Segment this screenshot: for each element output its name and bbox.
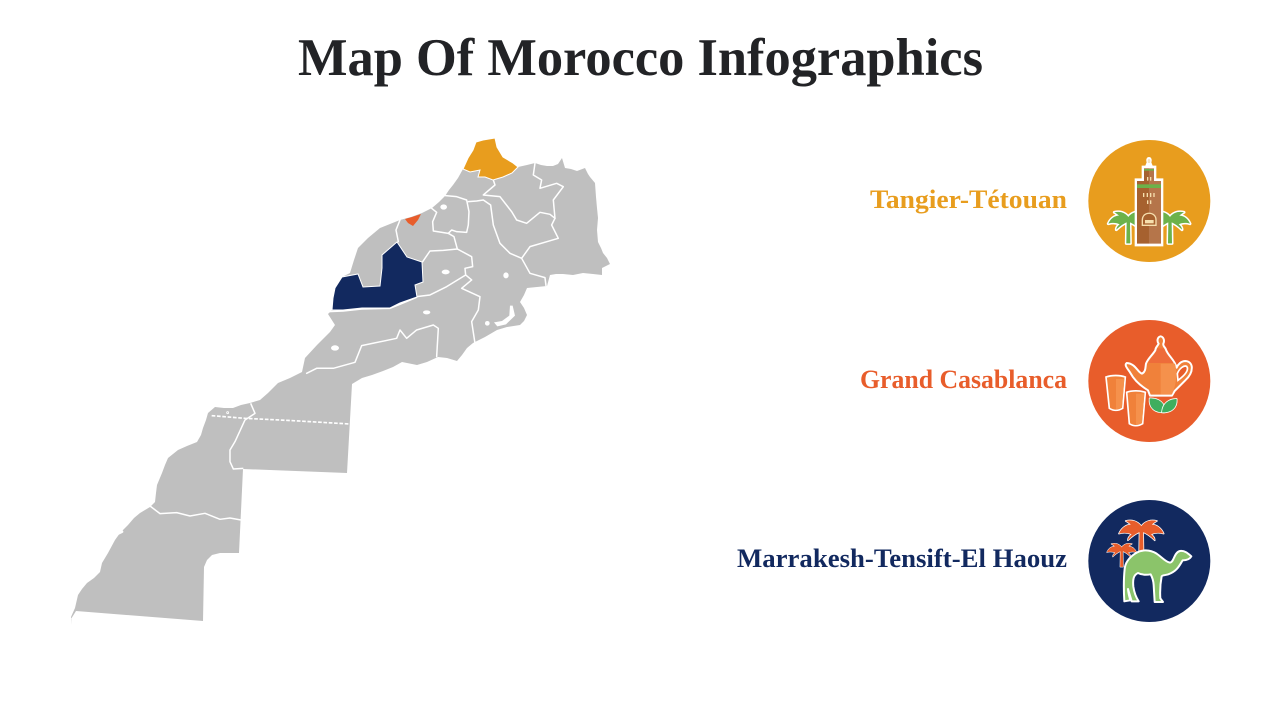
label: Tangier-Tétouan: Tangier-Tétouan (870, 185, 1068, 214)
icon: minaret and palms (1088, 140, 1210, 262)
land mass (71, 158, 610, 625)
leaves (1150, 398, 1177, 412)
region: Tangier-Tétouan (463, 138, 518, 180)
tower (1135, 157, 1163, 246)
label: Grand Casablanca: Grand Casablanca (860, 365, 1067, 394)
glasses (1106, 375, 1125, 410)
lakes and enclaves (331, 204, 515, 351)
title: Map Of Morocco Infographics (298, 29, 983, 87)
palms (1107, 520, 1164, 567)
northern region borders (307, 163, 563, 373)
icon: camel and palms (1088, 500, 1210, 622)
region: Grand Casablanca (405, 214, 421, 226)
camel (1124, 550, 1191, 602)
region: Marrakesh-Tensift-El Haouz (332, 242, 423, 310)
map of Morocco (71, 138, 610, 625)
label: Marrakesh-Tensift-El Haouz: Marrakesh-Tensift-El Haouz (737, 544, 1067, 573)
icon: teapot, glasses and leaves (1088, 320, 1210, 442)
palms (1108, 212, 1190, 243)
southern region borders (113, 403, 350, 538)
teapot (1126, 336, 1192, 396)
